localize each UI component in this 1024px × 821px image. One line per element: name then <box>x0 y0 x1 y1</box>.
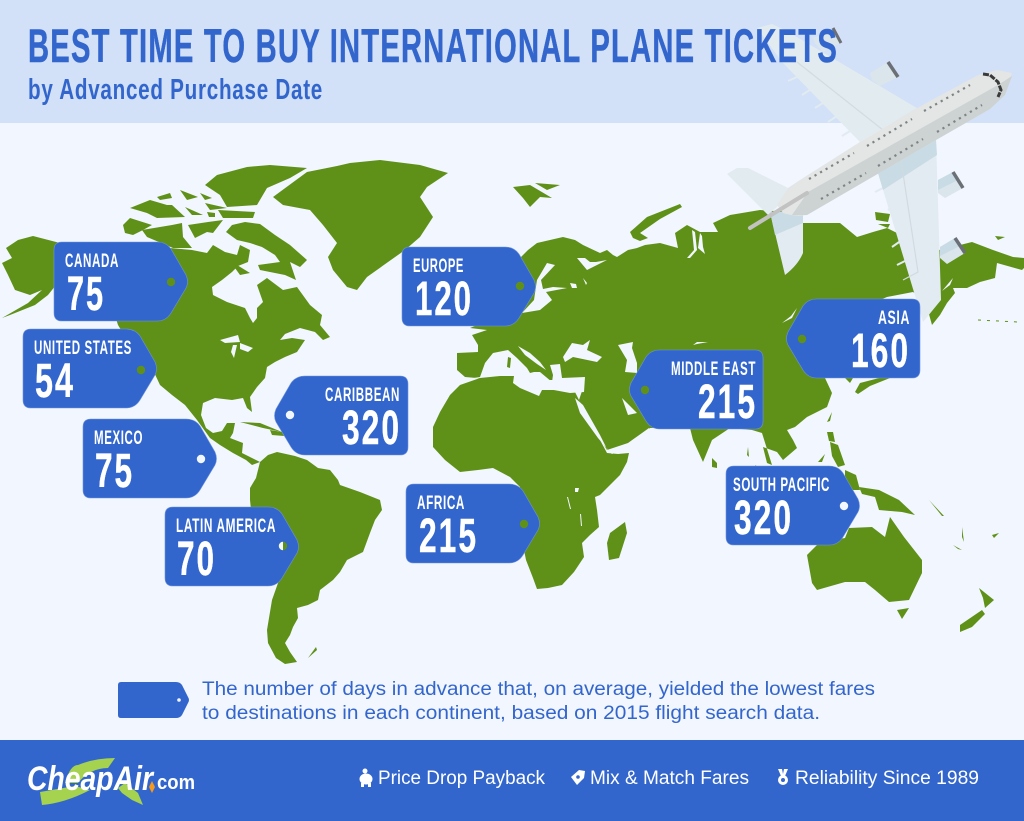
plane fuselage lower shade <box>792 76 1012 215</box>
continent: South America <box>250 452 382 664</box>
world map <box>2 160 1024 664</box>
plane wing flaps <box>875 187 907 265</box>
plane windows lower row <box>821 105 982 199</box>
tag: United States: UNITED STATES <box>34 337 132 359</box>
plane wing shadow <box>878 140 937 190</box>
logo swoosh <box>40 758 143 805</box>
continent: Eurasia <box>457 210 1024 465</box>
tag: Asia: 160 <box>851 325 910 378</box>
logo: CheapAir.com <box>27 758 195 805</box>
plane lower engines <box>938 172 965 264</box>
tag: Europe <box>402 247 536 326</box>
logo wordmark: CheapAir <box>27 760 154 798</box>
tag: Latin America: 70 <box>177 533 216 586</box>
tag: Asia <box>786 299 920 378</box>
legend text line two: to destinations in each continent, based on 2015 flight search data. <box>202 703 820 724</box>
header band <box>0 0 1024 123</box>
tag: Middle East: MIDDLE EAST <box>671 358 756 380</box>
icon: piggy bank <box>360 768 372 787</box>
tag: Mexico: MEXICO <box>94 427 143 449</box>
tag: Caribbean: CARIBBEAN <box>325 384 400 406</box>
plane tail fins <box>727 168 803 275</box>
tag: Latin America: LATIN AMERICA <box>176 515 276 537</box>
plane windows upper row <box>809 85 970 179</box>
plane wing rib <box>901 160 918 280</box>
plane rudder <box>750 193 807 228</box>
legend tag icon <box>118 682 189 718</box>
plane lower wing <box>878 140 941 322</box>
plane upper wing flaps <box>788 77 852 136</box>
tag: Africa <box>406 484 540 563</box>
sea: Mediterranean and inland seas <box>153 230 953 526</box>
plane upper engines <box>813 28 898 86</box>
tag: South Pacific: 320 <box>734 492 793 545</box>
tag: South Pacific <box>726 466 860 545</box>
tag: Mexico: 75 <box>95 445 134 498</box>
tag: Africa: 215 <box>419 510 478 563</box>
subtitle: by Advanced Purchase Date <box>28 74 323 106</box>
logo domain: com <box>157 772 195 794</box>
plane fuselage <box>777 70 1012 216</box>
tag: Canada: CANADA <box>65 250 119 272</box>
tag: Canada <box>54 242 188 321</box>
icon: medal <box>778 769 788 785</box>
tag: Caribbean: 320 <box>342 402 401 455</box>
footer text: Mix and Match Fares: Mix & Match Fares <box>590 768 749 789</box>
legend <box>118 679 875 724</box>
tag: Middle East <box>630 350 763 429</box>
footer text: Price Drop Payback: Price Drop Payback <box>378 768 545 789</box>
islands: Arctic, Atlantic and Caribbean <box>123 160 1005 658</box>
tag: Europe: EUROPE <box>413 255 464 277</box>
tag: Africa: AFRICA <box>417 492 465 514</box>
tag: Middle East: 215 <box>698 376 757 429</box>
footer text: Reliability Since 1989: Reliability Since 1989 <box>795 768 979 789</box>
tag: Canada: 75 <box>67 268 105 321</box>
tag: Latin America <box>165 507 298 586</box>
legend text line one: The number of days in advance that, on average, yielded the lowest fares <box>202 679 875 700</box>
tag: Asia: ASIA <box>878 307 910 329</box>
tag: United States: 54 <box>35 355 75 408</box>
tag: United States <box>23 329 156 408</box>
tag: Europe: 120 <box>415 273 473 326</box>
plane cockpit window <box>983 74 1001 97</box>
icon: price tag <box>571 770 585 785</box>
continent: North America <box>2 236 330 465</box>
airplane illustration <box>727 24 1012 322</box>
islands: Asia and Pacific <box>607 320 1018 632</box>
plane upper wing <box>757 24 917 142</box>
continent: Africa <box>433 375 629 589</box>
logo diamond <box>149 781 155 793</box>
tag: South Pacific: SOUTH PACIFIC <box>733 474 830 496</box>
tag: Caribbean <box>274 376 408 455</box>
plane upper wing rib <box>797 62 883 130</box>
footer band <box>0 740 1024 821</box>
tag: Mexico <box>83 419 216 498</box>
